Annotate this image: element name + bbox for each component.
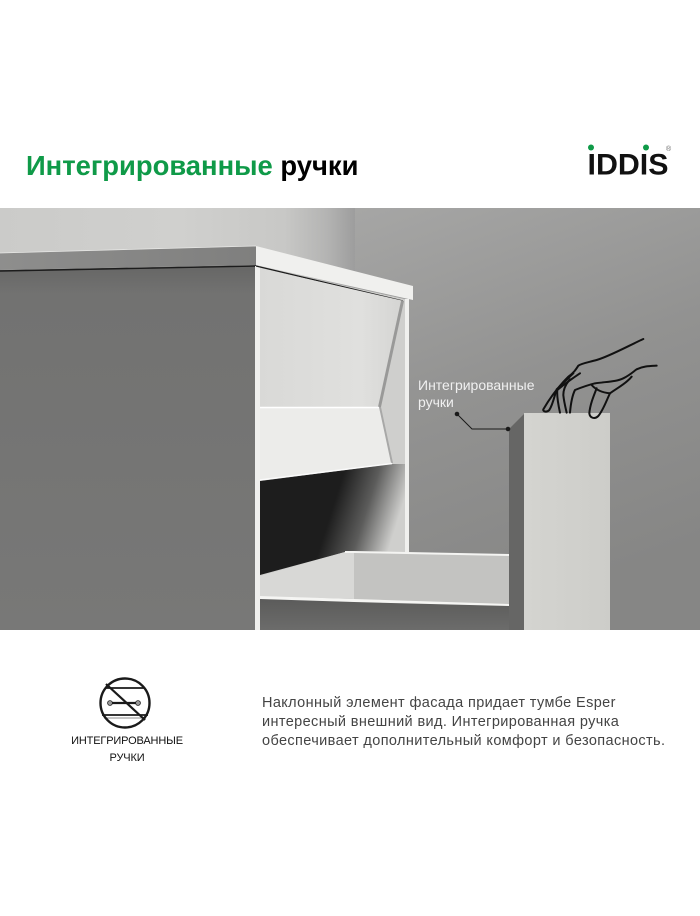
drawer xyxy=(260,551,509,630)
upper slanted facade xyxy=(260,268,404,407)
dark opening xyxy=(260,464,405,575)
description text: обеспечивает дополнительный комфорт и безопасность. xyxy=(262,733,665,749)
description text: интересный внешний вид. Интегрированная ручка xyxy=(262,714,619,730)
lower handle facade xyxy=(260,407,393,480)
callout label: Интегрированные xyxy=(418,377,535,393)
callout label: ручки xyxy=(418,394,454,410)
cabinet side xyxy=(0,265,256,630)
logo: IDDIS: ® xyxy=(666,145,672,153)
facade shadow strip xyxy=(378,301,404,407)
callout leader xyxy=(455,412,510,431)
cabinet with open drawer xyxy=(0,246,509,630)
icon caption xyxy=(71,735,183,764)
icon caption: ИНТЕГРИРОВАННЫЕ xyxy=(71,735,183,747)
cabinet front frame xyxy=(255,266,409,630)
countertop xyxy=(0,246,413,300)
icon: hand xyxy=(543,339,657,418)
title: Интегрированные ручки xyxy=(26,150,358,181)
product illustration xyxy=(0,208,700,630)
description text xyxy=(262,695,665,749)
icon caption: РУЧКИ xyxy=(110,752,144,764)
description text: Наклонный элемент фасада придает тумбе Esper xyxy=(262,695,616,711)
icon: integrated handle xyxy=(99,677,151,729)
pedestal cross-section xyxy=(509,413,610,630)
wall xyxy=(0,208,700,630)
